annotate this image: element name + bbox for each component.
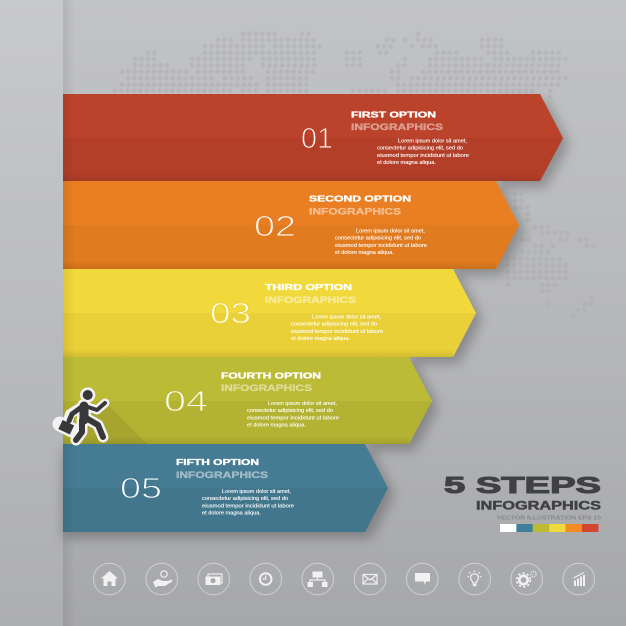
step 1 text: Lorem ipsum dolor sit amet, (398, 138, 467, 144)
colour legend bar (500, 524, 598, 532)
icon: envelope (354, 563, 386, 595)
step 5 text: Lorem ipsum dolor sit amet, (222, 489, 291, 495)
step 3 text: Lorem ipsum dolor sit amet, (312, 314, 381, 320)
step 3 text: eiusmod tempor incididunt ut labore (291, 329, 383, 335)
world map dots (115, 34, 594, 317)
title block (444, 472, 601, 521)
step 1 text: consectetur adipisicing elit, sed do (377, 146, 463, 152)
step 2 text: SECOND OPTION (309, 194, 411, 204)
step 4 text: FOURTH OPTION (221, 371, 321, 380)
icon: clock (250, 563, 282, 595)
icon: bar chart growth (563, 563, 594, 595)
left edge shade on arrows (63, 94, 75, 532)
step 2 text: Lorem ipsum dolor sit amet, (356, 228, 425, 234)
arrow 3: yellow (63, 269, 476, 357)
step 1 text: FIRST OPTION (351, 110, 436, 120)
step 2 text: eiusmod tempor incididunt ut labore (335, 243, 427, 249)
step 3 text: consectetur adipisicing elit, sed do (291, 322, 377, 328)
step 5 text: INFOGRAPHICS (176, 470, 268, 480)
step 4 text: INFOGRAPHICS (221, 383, 312, 393)
step 1 text: INFOGRAPHICS (351, 122, 443, 132)
arrow 1: red (63, 94, 563, 181)
step 2 text: consectetur adipisicing elit, sed do (335, 236, 421, 242)
step 4 text: 04 (164, 386, 208, 418)
step 4 text (164, 371, 339, 428)
step 5 text: eiusmod tempor incididunt ut labore (202, 504, 294, 510)
step 3 text (210, 283, 383, 342)
step 2 text: 02 (254, 211, 296, 243)
step 2 text: et dolore magna aliqua. (335, 250, 394, 256)
step 1 text: et dolore magna aliqua. (377, 160, 436, 166)
icon: gears (511, 563, 542, 595)
step 4 text: eiusmod tempor incididunt ut labore (247, 416, 339, 422)
arrow 2: orange (63, 181, 519, 269)
step 1 text: 01 (301, 123, 333, 155)
step 4 text: et dolore magna aliqua. (247, 422, 306, 428)
icon: light bulb (459, 563, 491, 595)
arrow 5: teal (63, 444, 388, 532)
icon: home (94, 563, 125, 595)
icon: banknotes (198, 563, 230, 595)
step 3 text: INFOGRAPHICS (265, 295, 356, 305)
arrow 4: olive (63, 357, 432, 444)
step 4 text: Lorem ipsum dolor sit amet, (268, 401, 337, 407)
arrow shadows (63, 100, 569, 538)
step 3 text: THIRD OPTION (265, 283, 352, 292)
step 5 text: et dolore magna aliqua. (202, 510, 261, 516)
icon: hand with coin (146, 563, 178, 595)
title block: VECTOR ILLUSTRATION EPS 10 (497, 515, 601, 521)
step 5 text: FIFTH OPTION (176, 458, 259, 467)
step 1 text: eiusmod tempor incididunt ut labore (377, 153, 469, 159)
step 3 text: et dolore magna aliqua. (291, 336, 350, 342)
step 4 text: consectetur adipisicing elit, sed do (247, 408, 333, 414)
step 3 text: 03 (210, 298, 251, 330)
icon: speech bubble (406, 563, 438, 595)
icon: running businessman (60, 387, 105, 440)
left strip panel (0, 0, 75, 626)
step 2 text (254, 194, 427, 256)
runner long shadow (70, 403, 147, 444)
step 5 text (120, 458, 294, 516)
step 1 text (301, 110, 469, 166)
step 2 text: INFOGRAPHICS (309, 206, 401, 216)
step 5 text: 05 (120, 473, 162, 505)
icon: network (302, 563, 334, 595)
step 5 text: consectetur adipisicing elit, sed do (202, 496, 288, 502)
title block: INFOGRAPHICS (476, 498, 601, 512)
title block: 5 STEPS (444, 472, 601, 498)
